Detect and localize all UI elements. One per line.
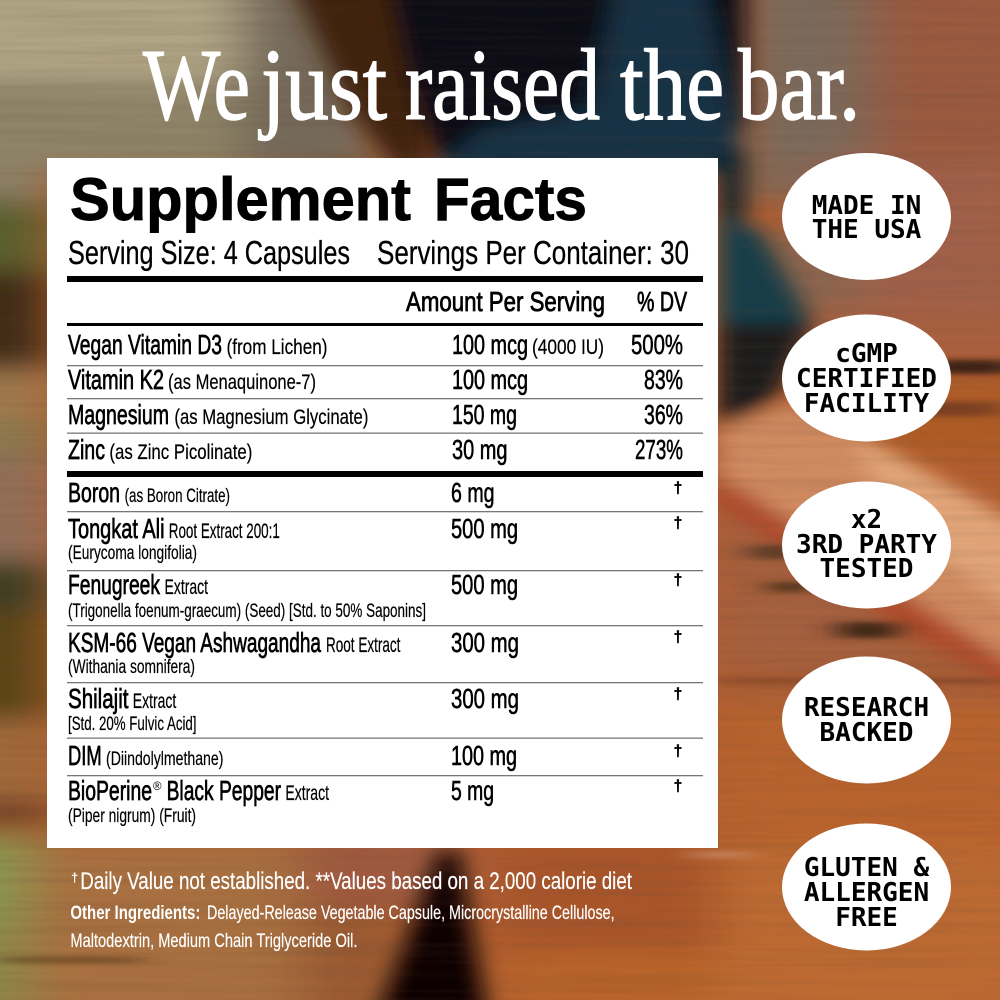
other ingredients: Other Ingredients:	[70, 903, 200, 924]
row: bioperine: (Piper nigrum) (Fruit)	[68, 806, 196, 827]
row: boron: Boron	[68, 477, 120, 508]
row: ashwagandha: Root Extract	[326, 633, 400, 657]
row: bioperine: Black Pepper	[167, 775, 281, 806]
heading: supplement facts: Supplement	[70, 166, 411, 233]
row: zinc	[68, 434, 683, 465]
badge: third party tested: 3RD PARTY	[796, 530, 937, 560]
badge: research backed: RESEARCH	[804, 693, 929, 723]
footnote: daily value: Daily Value not established. **Values based on a 2,000 calorie diet	[80, 868, 632, 895]
row: boron: (as Boron Citrate)	[125, 486, 230, 507]
row: shilajit: 300 mg	[451, 683, 519, 714]
row: tongkat ali	[68, 513, 682, 564]
title: just	[258, 29, 387, 142]
row: vitamin d3: 500%	[631, 329, 683, 360]
badge: cgmp certified facility: CERTIFIED	[796, 364, 937, 394]
row: vitamin k2: 100 mcg	[452, 364, 528, 395]
row: boron: 6 mg	[451, 477, 494, 508]
row: bioperine: Extract	[285, 781, 329, 805]
row: magnesium: (as Magnesium Glycinate)	[174, 405, 368, 429]
row: dim: 100 mg	[451, 740, 517, 771]
row: shilajit: Shilajit	[68, 683, 129, 714]
badge: cgmp certified facility: FACILITY	[804, 389, 929, 419]
badge: gluten and allergen free: ALLERGEN	[804, 878, 929, 908]
panel: supplement facts	[47, 158, 718, 848]
row: shilajit: Extract	[133, 689, 176, 713]
other ingredients: Delayed-Release Vegetable Capsule, Microcrystalline Cellulose,	[207, 903, 615, 924]
row: ashwagandha: 300 mg	[451, 627, 519, 658]
badge: research backed	[782, 656, 951, 784]
badge: third party tested	[782, 482, 951, 608]
row: boron	[68, 477, 682, 508]
row: shilajit: [Std. 20% Fulvic Acid]	[68, 714, 196, 735]
row: dim: †	[674, 743, 682, 760]
column header: amount: Amount Per Serving	[406, 286, 605, 317]
servings per container: Servings Per Container: 30	[377, 234, 689, 271]
row: tongkat ali: †	[674, 515, 682, 532]
row: vitamin k2: 83%	[644, 364, 683, 395]
title: We	[143, 29, 250, 142]
row: fenugreek: †	[674, 572, 682, 589]
row: ashwagandha: †	[674, 629, 682, 646]
badge: third party tested: TESTED	[820, 554, 913, 584]
row: dim	[68, 740, 682, 771]
row: fenugreek: Extract	[164, 575, 208, 599]
badge: gluten and allergen free: FREE	[835, 903, 898, 933]
serving size: Serving Size: 4 Capsules	[68, 234, 350, 271]
row: ashwagandha: (Withania somnifera)	[68, 657, 195, 678]
row: fenugreek: 500 mg	[451, 569, 518, 600]
row: fenugreek: Fenugreek	[68, 569, 161, 600]
row: zinc: 273%	[635, 434, 683, 465]
row: shilajit	[68, 683, 682, 735]
row: bioperine: †	[674, 778, 682, 795]
badge: made in the usa: THE USA	[812, 215, 922, 245]
row: vitamin d3	[68, 329, 683, 360]
other ingredients	[70, 903, 615, 952]
row: tongkat ali: Root Extract 200:1	[169, 519, 280, 543]
title: bar.	[738, 29, 860, 142]
row: magnesium: 36%	[644, 399, 683, 430]
row: fenugreek	[68, 569, 682, 622]
row: magnesium: Magnesium	[68, 399, 169, 430]
other ingredients: Maltodextrin, Medium Chain Triglyceride Oil.	[70, 931, 357, 952]
title: raised	[405, 29, 600, 142]
heading: supplement facts	[70, 166, 587, 233]
row: magnesium	[68, 399, 683, 430]
row: shilajit: †	[674, 686, 682, 703]
row: vitamin k2: (as Menaquinone-7)	[168, 370, 316, 394]
footnote: daily value: †	[71, 870, 78, 885]
row: vitamin d3: (from Lichen)	[226, 335, 328, 359]
badge: cgmp certified facility: cGMP	[835, 339, 898, 369]
heading: supplement facts: Facts	[434, 166, 587, 233]
badge: cgmp certified facility	[782, 314, 951, 442]
row: bioperine: 5 mg	[451, 775, 494, 806]
row: zinc: Zinc	[68, 434, 105, 465]
row: tongkat ali: 500 mg	[451, 513, 518, 544]
title: the	[620, 29, 724, 142]
badge: made in the usa	[782, 153, 951, 280]
row: zinc: 30 mg	[452, 434, 508, 465]
badge: gluten and allergen free	[782, 824, 951, 950]
row: vitamin d3: (4000 IU)	[532, 335, 604, 359]
badge: made in the usa: MADE IN	[812, 191, 921, 221]
row: ashwagandha: KSM-66 Vegan Ashwagandha	[68, 627, 321, 658]
column header: daily value: % DV	[637, 286, 687, 317]
row: dim: (Diindolylmethane)	[106, 749, 223, 770]
row: tongkat ali: (Eurycoma longifolia)	[68, 543, 197, 564]
badge: gluten and allergen free: GLUTEN &	[804, 853, 929, 883]
row: zinc: (as Zinc Picolinate)	[109, 440, 252, 464]
row: dim: DIM	[68, 740, 102, 771]
row: vitamin d3: Vegan Vitamin D3	[68, 329, 222, 360]
row: magnesium: 150 mg	[452, 399, 517, 430]
row: fenugreek: (Trigonella foenum-graecum) (Seed) [Std. to 50% Saponins]	[68, 601, 426, 622]
row: ashwagandha	[68, 627, 682, 678]
title	[143, 29, 860, 142]
row: vitamin d3: 100 mcg	[452, 329, 528, 360]
row: bioperine: BioPerine	[68, 775, 152, 806]
row: vitamin k2: Vitamin K2	[68, 364, 164, 395]
row: bioperine: ®	[153, 779, 162, 793]
badge: third party tested: x2	[851, 505, 882, 535]
row: vitamin k2	[68, 364, 683, 395]
row: boron: †	[674, 480, 682, 497]
row: bioperine	[68, 775, 682, 827]
row: tongkat ali: Tongkat Ali	[68, 513, 164, 544]
badge: research backed: BACKED	[820, 718, 913, 748]
